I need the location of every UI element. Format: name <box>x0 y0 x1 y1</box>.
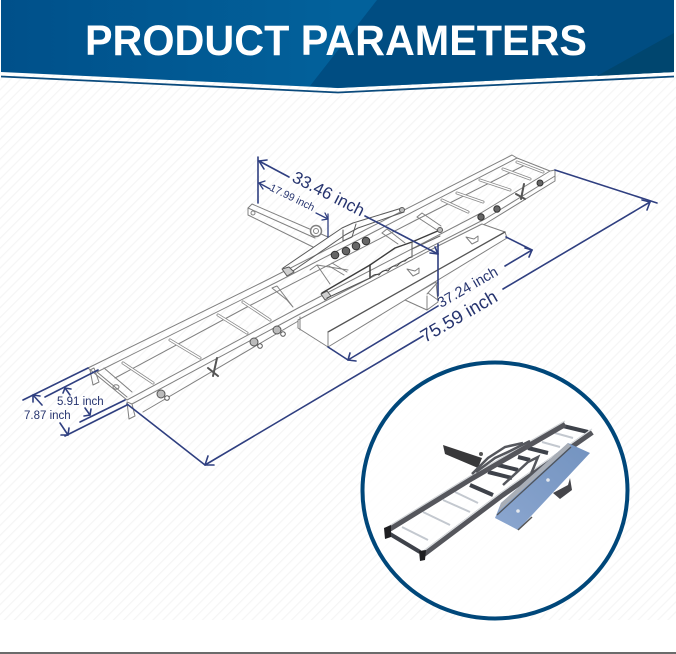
near end plate <box>88 368 132 400</box>
rungs <box>123 162 543 383</box>
photo: dark cross bars <box>390 426 588 552</box>
bolts on cradle <box>331 180 543 259</box>
right rail <box>127 158 555 419</box>
photo: ramp plate <box>495 443 590 530</box>
header banner <box>1 0 674 92</box>
wheel cradle arms <box>282 208 442 300</box>
label: 17.99 inch: 17.99 inch <box>268 182 317 214</box>
photo: frame rails <box>384 421 592 561</box>
dimension: 75.59 lines <box>127 170 657 465</box>
loading ramp <box>298 224 507 347</box>
photo: cradle <box>472 441 538 488</box>
dimension: 17.99 lines <box>259 181 328 237</box>
ramp cross plates <box>272 213 441 307</box>
line drawing: rack <box>88 155 555 419</box>
dimension: 33.46 lines <box>258 157 438 296</box>
under bracket <box>405 282 438 310</box>
dimension lines <box>23 157 657 465</box>
left rail <box>88 155 525 385</box>
photo: light rungs <box>402 433 573 540</box>
hitch bar <box>248 204 328 247</box>
rung highlights <box>123 162 543 383</box>
photo: hitch bar <box>443 445 572 499</box>
bottom strip <box>0 652 676 654</box>
title: PRODUCT PARAMETERS <box>85 17 587 65</box>
side knobs and wing nuts <box>157 184 525 400</box>
label: 75.59 inch: 75.59 inch <box>416 286 501 346</box>
product photo circle <box>362 362 628 618</box>
label: 7.87 inch: 7.87 inch <box>24 410 71 422</box>
label: 33.46 inch: 33.46 inch <box>289 168 368 220</box>
label: 5.91 inch: 5.91 inch <box>57 396 104 408</box>
label: 37.24 inch: 37.24 inch <box>435 264 501 311</box>
dimension: 37.24 lines <box>328 237 532 361</box>
dimension: left width lines <box>23 368 127 436</box>
